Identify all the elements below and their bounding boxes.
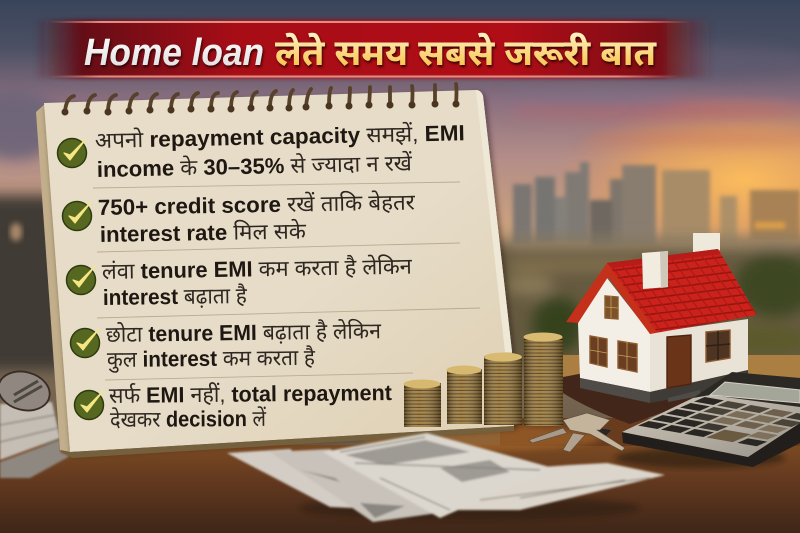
title text: Home loan bbox=[84, 32, 264, 74]
calculator shadow bbox=[615, 448, 785, 468]
icon: glasses bbox=[0, 366, 54, 416]
coin stack 3 bbox=[484, 352, 522, 425]
divider lines bbox=[93, 182, 480, 380]
illustration: loan documents bbox=[227, 433, 665, 522]
item 2: credit score bbox=[62, 188, 416, 247]
illustration: house on wooden board bbox=[563, 233, 757, 424]
item 1: repayment capacity bbox=[58, 120, 465, 182]
icon: house keys bbox=[529, 413, 625, 452]
text: item 2: interest rate मिल सके bbox=[100, 217, 307, 247]
title text: लेते समय सबसे जरूरी बात bbox=[275, 31, 657, 73]
notebook spiral binding bbox=[62, 84, 460, 116]
document sheets bbox=[227, 433, 665, 522]
text: item 4: छोटा tenure EMI बढ़ाता है लेकिन bbox=[106, 317, 382, 347]
title banner bbox=[34, 20, 714, 78]
text: item 4 bbox=[106, 317, 382, 374]
text: item 3 bbox=[102, 253, 413, 310]
text: item 3: interest बढ़ाता है bbox=[103, 282, 247, 310]
calculator keys bbox=[638, 397, 800, 446]
background: distant town and trees bbox=[0, 195, 800, 370]
text: item 5: देखकर decision लें bbox=[110, 405, 267, 432]
house walls bbox=[578, 278, 748, 403]
red roof bbox=[566, 249, 757, 334]
documents shadow bbox=[300, 496, 640, 520]
notebook paper bbox=[44, 90, 514, 452]
wooden board bbox=[563, 370, 700, 424]
back chimney bbox=[693, 233, 720, 262]
front chimney bbox=[642, 251, 668, 289]
text: item 1 bbox=[95, 120, 465, 182]
icon: check 3 bbox=[66, 266, 96, 294]
calculator top surface bbox=[622, 395, 800, 457]
text: item 5 bbox=[109, 380, 393, 432]
icon: check 5 bbox=[74, 390, 104, 420]
wooden table bbox=[0, 355, 800, 533]
banner ribbon bbox=[34, 20, 714, 78]
icon: check 2 bbox=[62, 202, 92, 230]
left desk papers bbox=[0, 402, 70, 478]
notebook back pages bbox=[36, 103, 70, 452]
icon: check 4 bbox=[70, 328, 100, 358]
illustration: calculator bbox=[615, 372, 800, 468]
calculator back bbox=[693, 372, 800, 410]
illustration: coin stacks bbox=[404, 332, 563, 427]
text: item 4: कुल interest कम करता है bbox=[107, 344, 315, 374]
panel: notebook page bbox=[36, 84, 514, 458]
item 3: long tenure bbox=[66, 253, 413, 310]
text: item 1: income के 30–35% से ज्यादा न रखें bbox=[97, 149, 413, 182]
background: blurred city skyline bbox=[513, 162, 800, 245]
coin stack 2 bbox=[446, 366, 482, 424]
text: item 3: लंवा tenure EMI कम करता है लेकिन bbox=[102, 253, 413, 284]
text: item 2 bbox=[98, 188, 416, 247]
item 4: short tenure bbox=[70, 317, 382, 374]
title text bbox=[84, 31, 657, 74]
text: item 1: अपनो repayment capacity समझें, EMI bbox=[95, 120, 465, 153]
icon: check 1 bbox=[58, 138, 86, 168]
coin stack 4 bbox=[524, 332, 563, 426]
text: item 2: 750+ credit score रखें ताकि बेहतर bbox=[98, 188, 416, 220]
windows and door bbox=[590, 296, 730, 388]
text: item 5: सर्फ EMI नहीं, total repayment bbox=[109, 380, 393, 408]
calculator front edge bbox=[622, 423, 800, 467]
coin stack 1 bbox=[404, 380, 441, 427]
calculator display bbox=[710, 382, 800, 403]
item 5: total repayment bbox=[74, 380, 393, 432]
